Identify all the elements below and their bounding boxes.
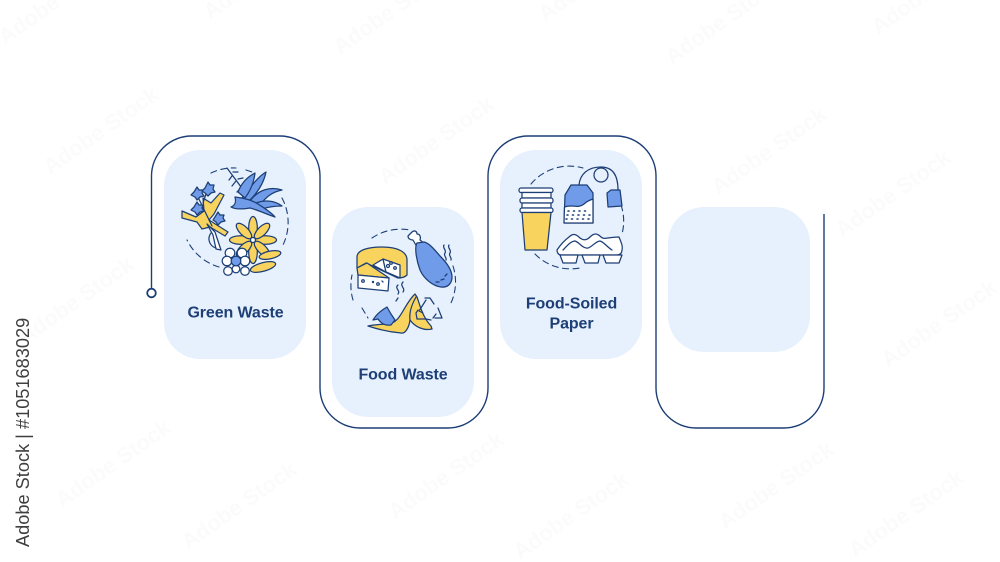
- text: Adobe Stock: [51, 414, 176, 512]
- icon: food-soiled paper: [519, 166, 624, 269]
- text: Adobe Stock: [39, 81, 164, 179]
- heading: Food-Soiled Paper: Food-Soiled: [526, 296, 617, 312]
- connector line: [152, 136, 824, 428]
- panel: food-soiled paper background: [500, 150, 642, 359]
- text: Adobe Stock: [844, 464, 969, 562]
- text: Adobe Stock: [877, 274, 1000, 372]
- panel: empty fourth card: [668, 207, 810, 352]
- text: Adobe Stock: [707, 101, 832, 199]
- start marker: [147, 289, 156, 297]
- text: Adobe Stock: [714, 436, 839, 534]
- heading: Food-Soiled Paper: Paper: [550, 316, 593, 332]
- heading: Food Waste: Food Waste: [358, 366, 448, 384]
- credit: Adobe Stock id: Adobe Stock | #1051683029: [13, 318, 33, 547]
- text: Adobe Stock: [831, 144, 956, 242]
- icon: food waste: [351, 229, 456, 333]
- text: Adobe Stock: [374, 91, 499, 189]
- panel: food waste background: [332, 207, 474, 417]
- text: Adobe Stock: [384, 426, 509, 524]
- text: Adobe Stock: [177, 456, 302, 554]
- text: Adobe Stock: [14, 251, 139, 349]
- panel: green waste background: [164, 150, 306, 359]
- heading: Green Waste: Green Waste: [187, 304, 284, 322]
- icon: green waste: [182, 168, 288, 275]
- text: Adobe Stock: [509, 466, 634, 562]
